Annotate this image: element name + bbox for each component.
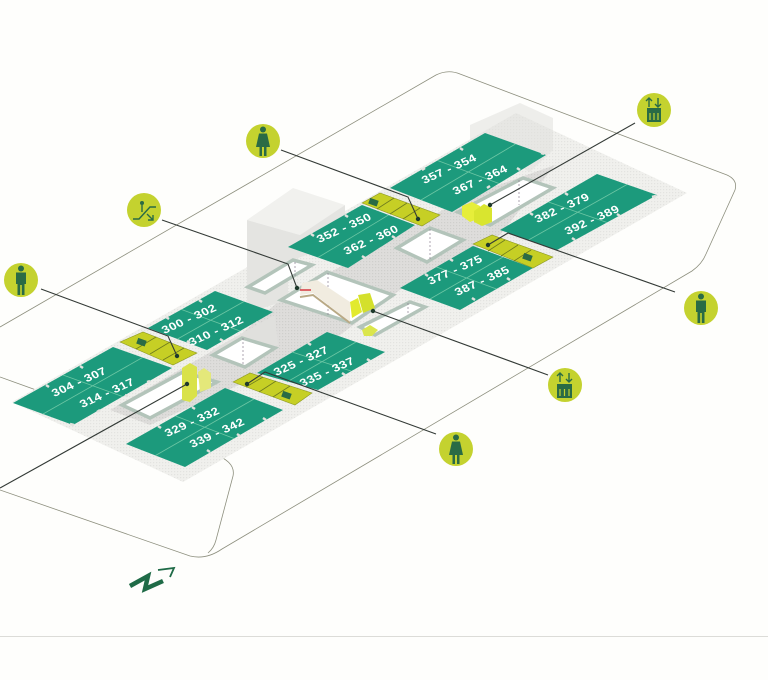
north arrow <box>130 568 174 589</box>
icon: escalator <box>127 193 161 227</box>
shop block 300-312: 310 - 312 <box>186 313 246 348</box>
icon: men's restroom west <box>4 263 38 297</box>
shop block 300-312: 300 - 302 <box>159 301 219 336</box>
shop block 377-387: 377 - 375 <box>425 252 485 287</box>
floor plate <box>12 113 687 482</box>
building outline <box>0 72 736 557</box>
restroom zone centre <box>362 193 440 226</box>
page fold line <box>0 636 768 638</box>
callout line: elevator centre <box>371 309 548 375</box>
shop block 352-360: 352 - 350 <box>314 210 374 245</box>
restroom zone south <box>233 373 312 405</box>
icon: men's restroom east <box>684 291 718 325</box>
icon: elevator centre <box>548 368 582 402</box>
shop block 357-367: 357 - 354 <box>419 151 479 186</box>
elevator shaft north <box>462 202 492 226</box>
shop block 325-337: 325 - 327 <box>271 343 331 378</box>
shop block 377-387 <box>400 246 533 310</box>
shop block 382-392: 392 - 389 <box>562 202 622 237</box>
callout line: elevator north <box>488 123 635 207</box>
restroom zone south-west <box>120 332 197 365</box>
shop block 329-342: 339 - 342 <box>187 415 247 450</box>
shop block 357-367 <box>390 133 546 212</box>
restroom zone east <box>473 235 553 268</box>
icon: women's restroom top <box>246 124 280 158</box>
callout line: restroom south <box>245 372 436 434</box>
callout line: restroom south-west <box>41 289 179 358</box>
callout line: restroom centre <box>281 150 420 221</box>
shop block 329-342 <box>126 388 283 467</box>
shop block 325-337: 335 - 337 <box>297 354 357 389</box>
elevator columns south <box>182 363 211 402</box>
callout line: elevator south <box>0 382 189 488</box>
shop block 377-387: 387 - 385 <box>452 263 512 298</box>
shop block 325-337 <box>257 332 385 390</box>
shop block 352-360 <box>288 205 415 268</box>
translucent tower: north <box>470 103 553 172</box>
translucent tower: centre <box>247 188 345 312</box>
shop block 304-317 <box>13 347 172 425</box>
escalator <box>300 280 350 323</box>
elevator columns centre <box>350 293 378 336</box>
shop block 382-392: 382 - 379 <box>532 190 592 225</box>
shop block 304-317: 304 - 307 <box>49 364 109 399</box>
icon: women's restroom south <box>439 432 473 466</box>
shop block 300-312 <box>148 291 273 350</box>
shop block 329-342: 329 - 332 <box>162 404 222 439</box>
shop block 352-360: 362 - 360 <box>341 222 401 257</box>
callout line: restroom east <box>486 233 675 292</box>
atrium voids <box>122 178 553 418</box>
shop block 304-317: 314 - 317 <box>77 375 137 410</box>
translucent tower: south <box>212 315 278 367</box>
shop block 357-367: 367 - 364 <box>450 162 510 197</box>
shop block 382-392 <box>500 174 657 250</box>
callout line: escalator <box>162 220 299 290</box>
icon: elevator north <box>637 93 671 127</box>
